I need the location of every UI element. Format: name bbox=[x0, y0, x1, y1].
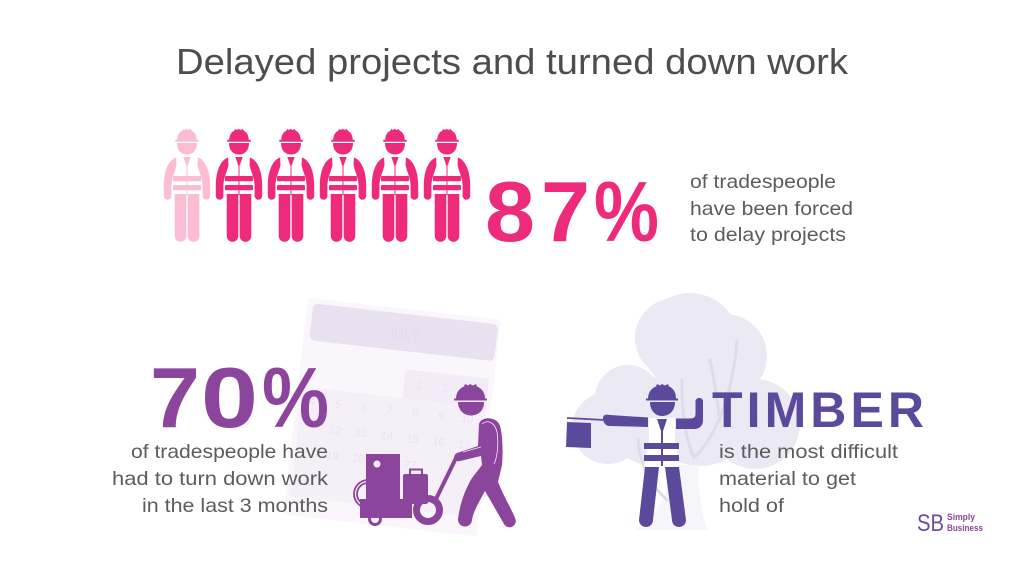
icon: calendar background: 21 bbox=[377, 456, 391, 469]
icon: worker pushing cart bbox=[354, 384, 516, 527]
flag pole bbox=[567, 418, 605, 420]
stat: 87%: % bbox=[594, 165, 659, 260]
tree branches bbox=[638, 341, 737, 500]
cart wheel bbox=[416, 498, 440, 522]
stat: 87% bbox=[485, 165, 659, 260]
title: Delayed projects and turned down work bbox=[176, 41, 849, 82]
stat: 70% bbox=[150, 351, 329, 446]
suitcase bbox=[403, 474, 428, 504]
icon: calendar background: 13 bbox=[354, 427, 368, 440]
logo: Simply Business: Business bbox=[947, 523, 983, 534]
text: 87% description: to delay projects bbox=[690, 224, 846, 246]
logo: Simply Business bbox=[917, 510, 983, 537]
text: 70% description bbox=[112, 441, 328, 517]
icon: calendar background: 14 bbox=[380, 430, 394, 443]
helmet and head bbox=[454, 384, 487, 416]
coiled cable bbox=[354, 480, 382, 508]
vest bbox=[644, 418, 680, 466]
icon: calendar background: 20 bbox=[351, 453, 365, 466]
text: 70% description: had to turn down work bbox=[112, 468, 328, 490]
stat: 87%: 7 bbox=[541, 165, 590, 260]
body bbox=[454, 418, 516, 527]
icon: calendar background: 2 bbox=[441, 383, 448, 395]
text: timber description: hold of bbox=[719, 495, 785, 517]
logo: Simply Business: SB bbox=[917, 510, 944, 537]
stat: 87%: 8 bbox=[485, 165, 535, 260]
text: 87% description bbox=[690, 171, 853, 246]
icon: calendar background: 16 bbox=[432, 436, 445, 449]
text: 87% description: of tradespeople bbox=[690, 171, 836, 193]
stat: TIMBER: TIMBER bbox=[712, 382, 924, 438]
helmet and head bbox=[646, 384, 678, 416]
icon: calendar background: 6 bbox=[360, 402, 368, 414]
stat: 70%: % bbox=[262, 351, 329, 446]
cart base bbox=[360, 499, 412, 518]
stat: 70%: 7 bbox=[150, 351, 200, 446]
icon: calendar background: 17 bbox=[458, 439, 471, 452]
large box bbox=[366, 454, 400, 518]
pictogram: six workers, one faded bbox=[164, 129, 470, 242]
flag bbox=[566, 422, 591, 448]
stat: 70%: 0 bbox=[201, 351, 258, 446]
small wheel bbox=[370, 514, 380, 524]
text: 70% description: of tradespeople have bbox=[131, 441, 328, 463]
logo: Simply Business: Simply bbox=[947, 512, 976, 523]
icon: calendar background: 8 bbox=[412, 407, 419, 420]
icon: calendar background bbox=[283, 298, 501, 536]
text: timber description: material to get bbox=[719, 468, 857, 490]
right arm bbox=[676, 398, 703, 429]
icon: calendar background: 1 bbox=[415, 380, 422, 392]
collar and zip bbox=[657, 419, 667, 466]
left arm bbox=[603, 415, 648, 427]
icon: calendar background: 19 bbox=[325, 450, 339, 463]
icon: calendar background: 12 bbox=[328, 424, 342, 437]
icon: calendar background: 22 bbox=[403, 459, 416, 472]
icon: calendar background: 4 bbox=[309, 396, 316, 408]
cart handle bbox=[436, 456, 457, 499]
icon: calendar background: 5 bbox=[334, 399, 342, 411]
icon: calendar background: 7 bbox=[386, 404, 393, 417]
text: 70% description: in the last 3 months bbox=[142, 495, 328, 517]
icon: calendar background: 10 bbox=[460, 413, 474, 426]
text: timber description: is the most difficult bbox=[719, 441, 899, 463]
icon: calendar background: JULY bbox=[386, 324, 422, 344]
body highlight bbox=[463, 422, 498, 464]
legs bbox=[639, 467, 659, 527]
text: 87% description: have been forced bbox=[690, 198, 853, 220]
icon: calendar background: 3 bbox=[467, 385, 474, 398]
tree trunk base bbox=[633, 465, 707, 530]
icon: tree background bbox=[572, 293, 800, 530]
icon: calendar background: 15 bbox=[406, 433, 419, 446]
icon: calendar background: 9 bbox=[438, 410, 445, 423]
icon: worker holding flag bbox=[566, 384, 703, 527]
vest stripes bbox=[644, 443, 679, 449]
text: timber description bbox=[719, 441, 899, 517]
